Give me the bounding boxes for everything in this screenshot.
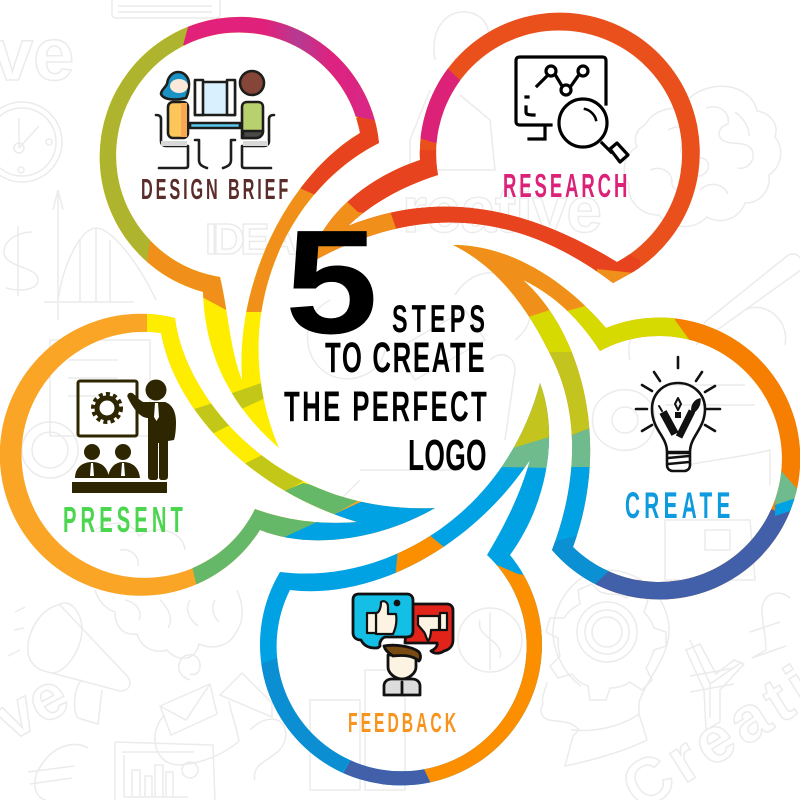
red dislike bubble [405, 604, 453, 653]
tail and ring orange section [114, 112, 379, 312]
lower brain present [95, 523, 185, 566]
design person doodle [410, 12, 495, 170]
monitor frame [516, 57, 606, 139]
pound sign [750, 593, 790, 658]
bar chart frame [115, 742, 215, 800]
audience member right [115, 444, 131, 460]
icon: meeting at a table [156, 71, 274, 168]
coin and stacks feedback [458, 608, 522, 672]
first olive stripe [194, 404, 229, 434]
title: big number 5: 5 [285, 200, 378, 365]
title: the perfect: THE PERFECT [284, 382, 487, 431]
ring navy section [343, 760, 430, 786]
euro sign [28, 745, 88, 800]
clock [0, 102, 62, 182]
tail orange section [453, 245, 586, 317]
chart axis [44, 190, 156, 320]
icon: light bulb with design tools [636, 357, 720, 471]
brush [679, 411, 692, 437]
pencil [663, 412, 675, 434]
thumbs down [418, 616, 439, 641]
word creative: reative [402, 174, 602, 246]
trend line [537, 76, 578, 86]
keyboard [112, 0, 220, 18]
swirl: present ring and tail [0, 300, 450, 600]
swirl: create ring and tail [453, 245, 800, 600]
tail orange section [317, 202, 396, 259]
rays [636, 357, 720, 431]
word idea: IDEA [205, 215, 297, 264]
tail olive section [514, 383, 550, 448]
presenter body and pointing arm [127, 393, 176, 480]
tail teal section [571, 428, 590, 467]
table [190, 123, 240, 128]
icon: research monitor with magnifier [516, 57, 628, 162]
chairs and legs [156, 115, 188, 168]
presenter head [146, 380, 166, 400]
brain bottom left [95, 590, 242, 658]
icon: feedback speech bubbles and person [353, 594, 453, 695]
step label: research: RESEARCH [503, 167, 627, 204]
swirl: feedback ring and tail [260, 383, 550, 786]
blue like bubble [353, 594, 413, 648]
tail blue section [284, 502, 435, 540]
dollar sign [4, 226, 38, 296]
title: steps: STEPS [392, 297, 485, 340]
gear [93, 394, 121, 422]
presentation board [78, 381, 137, 436]
yen sign [690, 640, 742, 718]
title: logo: LOGO [408, 430, 487, 480]
bulb glass [652, 383, 705, 452]
arm orange section [396, 536, 444, 573]
right person head [240, 71, 264, 95]
person shoulders [384, 679, 420, 695]
swirl: research ring and tail [317, 12, 700, 283]
right person body [242, 102, 263, 138]
monitor screen details [526, 97, 534, 115]
pencil right [697, 254, 800, 344]
step label: feedback: FEEDBACK [348, 706, 457, 738]
ring and tail lime section [453, 245, 690, 352]
blueprint paper [195, 82, 235, 115]
tail teal section [500, 437, 550, 468]
ring right blue section [775, 498, 794, 516]
tail blue section [552, 467, 610, 586]
icon: presenter with audience [72, 380, 176, 493]
arm yellow section [147, 300, 320, 520]
tail olive stripe [232, 383, 264, 409]
at sign and create doodles [592, 390, 655, 450]
gear head bottom right [592, 617, 622, 647]
tail red section [318, 150, 640, 283]
person head [388, 655, 416, 679]
inner doodles center [308, 273, 531, 510]
ring navy section [595, 509, 791, 600]
left person body [168, 102, 188, 138]
pen nib [675, 398, 681, 410]
brain top right [624, 86, 781, 227]
tail olive section [549, 352, 590, 435]
thumbs up [376, 601, 396, 634]
step label: design brief: DESIGN BRIEF [141, 173, 288, 205]
swirl: design brief ring and tail [100, 16, 379, 448]
ring orange section [424, 564, 542, 782]
megaphone [28, 603, 130, 724]
inner doodles left ring [50, 340, 150, 436]
ring right teal section [775, 471, 797, 505]
ring red section [300, 117, 379, 194]
magnifier [559, 99, 607, 147]
left person head with blue hair [161, 72, 189, 99]
ring darker blue section [261, 658, 350, 772]
person hair [384, 645, 420, 661]
tip orange section [597, 269, 632, 283]
ring and arm green section [192, 483, 358, 584]
ring magenta section [420, 68, 460, 144]
audience member left [84, 444, 100, 460]
bulb base [667, 453, 690, 471]
ring magenta section [183, 16, 375, 120]
ring darker blue section [552, 536, 609, 586]
ring olive section [100, 26, 188, 262]
step label: create: CREATE [625, 486, 730, 527]
title: to create: TO CREATE [325, 333, 485, 382]
stage [72, 482, 167, 493]
envelopes [160, 673, 272, 735]
second olive stripe [245, 455, 303, 492]
step label: present: PRESENT [63, 501, 183, 541]
